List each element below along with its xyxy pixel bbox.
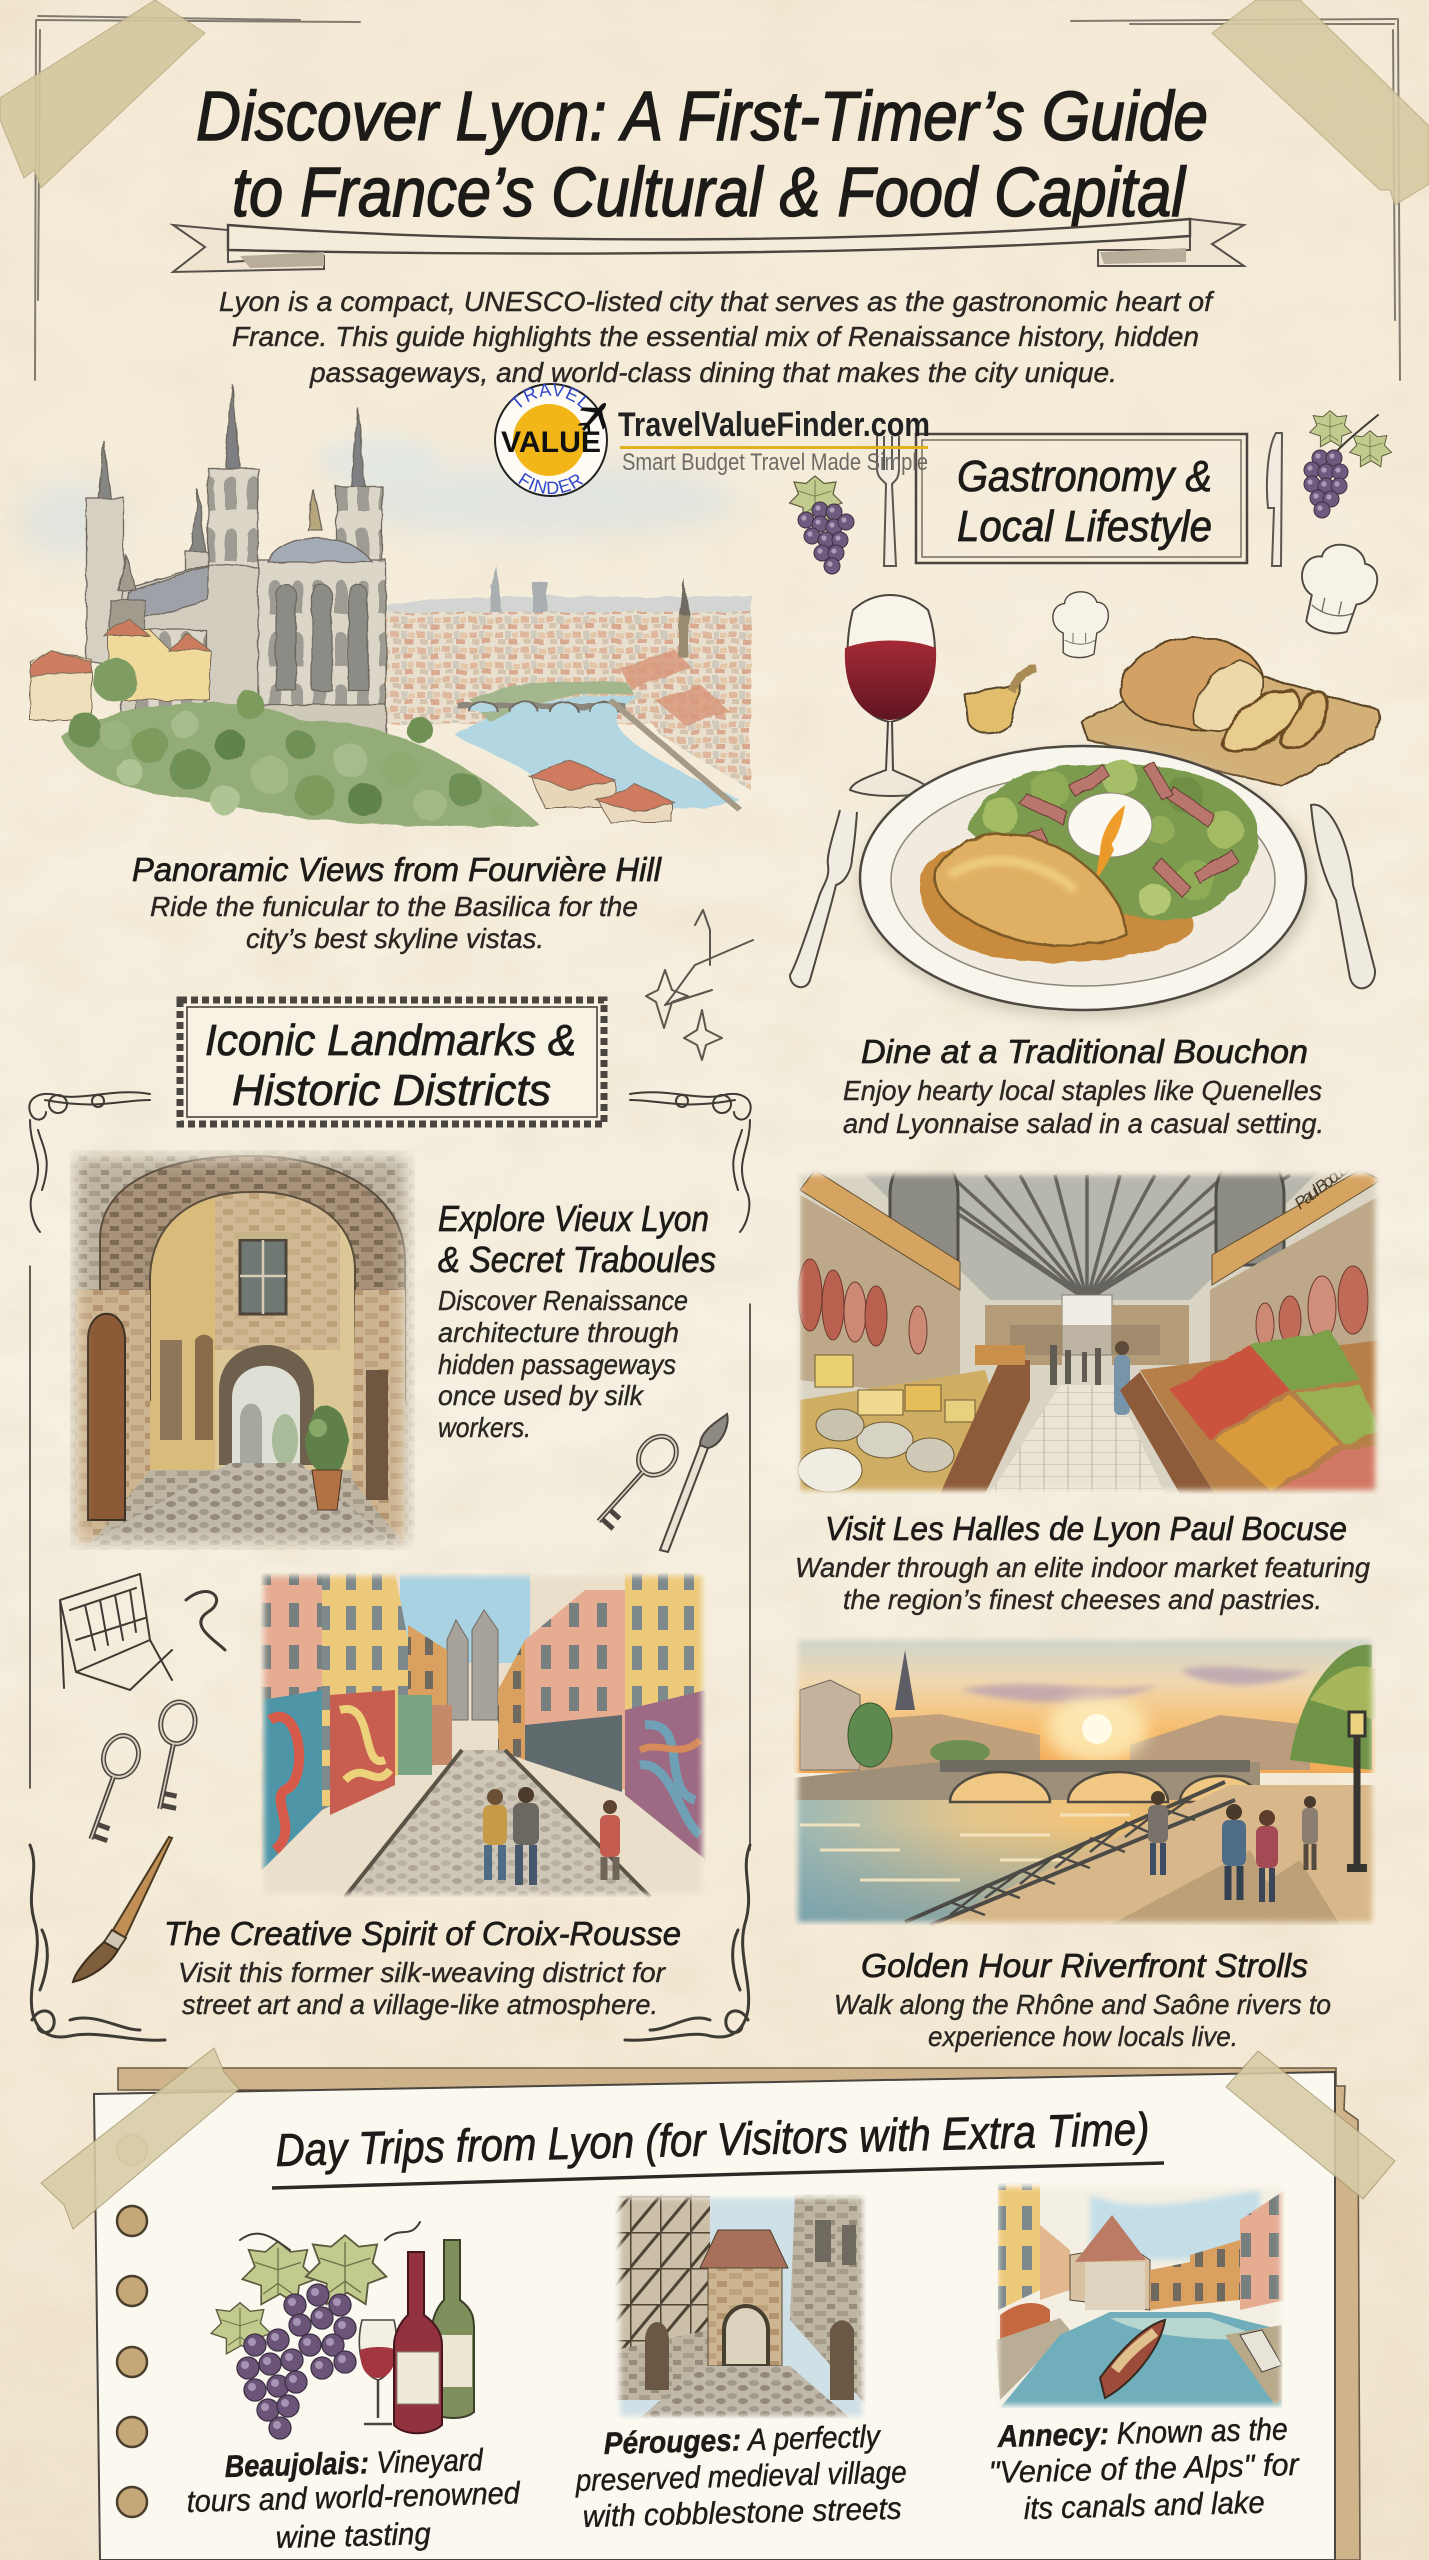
- caption: Golden Hour: Golden Hour Riverfront Strolls: [861, 1947, 1308, 1984]
- red roofs foreground: [528, 760, 674, 822]
- icon: fork beside box: [877, 436, 899, 566]
- cobbled street: [345, 1750, 650, 1897]
- water: [793, 1798, 1293, 1925]
- towers at end of street: [447, 1610, 498, 1720]
- doodle: basilica sketch and sparkles: [646, 910, 753, 1060]
- chef hat small: [1053, 592, 1108, 658]
- poached egg: [1068, 793, 1152, 880]
- right facades: [498, 1640, 525, 1760]
- crowd: [1050, 1345, 1101, 1386]
- intro paragraph: passageways, and world-class dining that makes the city unique.: [309, 357, 1117, 388]
- cutlery knife: [1311, 805, 1375, 988]
- caption: Golden Hour: experience how locals live.: [928, 2021, 1238, 2052]
- bridge: [793, 1762, 1260, 1800]
- section heading: Iconic Landmarks and Historic Districts: Iconic Landmarks &: [205, 1016, 576, 1065]
- section heading: Gastronomy and Local Lifestyle: Local Lifestyle: [957, 502, 1212, 551]
- logo badge: TRAVEL: [510, 383, 586, 408]
- back sheet: [118, 2068, 1360, 2560]
- lamp post: [1354, 1735, 1360, 1868]
- salad: [968, 760, 1258, 920]
- wine glass: [845, 595, 936, 796]
- caption: Golden Hour: Walk along the Rhône and Saône rivers to: [834, 1989, 1331, 2020]
- ornamental frame: landmarks panel: [29, 1092, 751, 2040]
- houses below basilica: [30, 618, 210, 720]
- caption: Dine at a Traditional Bouchon: Dine at a Traditional Bouchon: [861, 1033, 1308, 1070]
- caption: Beaujolais: tours and world-renowned: [186, 2475, 522, 2519]
- tape right: [1226, 2051, 1395, 2199]
- grapes top right: [1304, 411, 1392, 518]
- illustration: golden hour riverfront: [793, 1633, 1376, 1925]
- doodle: large paintbrush: [73, 1837, 172, 1982]
- title: [196, 77, 1208, 231]
- people walking: [483, 1787, 620, 1885]
- railing: [905, 1782, 1235, 1925]
- illustration: Annecy canal: [994, 2183, 1285, 2408]
- intro paragraph: France. This guide highlights the essential mix of Renaissance history, hidden: [232, 321, 1199, 352]
- promenade: [930, 1785, 1376, 1925]
- caption: Annecy: [988, 2411, 1301, 2526]
- left stall: [800, 1195, 960, 1400]
- caption: Croix-Rousse: [164, 1915, 681, 2020]
- text: Explore Vieux Lyon and Secret Traboules: hidden passageways: [438, 1349, 676, 1380]
- bread on wooden board: [1082, 637, 1380, 786]
- produce stalls: [1140, 1340, 1381, 1494]
- left facades: [260, 1573, 322, 1870]
- wine glass: [359, 2320, 396, 2380]
- intro paragraph: Lyon is a compact, UNESCO-listed city that serves as the gastronomic heart of: [219, 286, 1215, 317]
- caption: Les Halles: Wander through an elite indoor market featuring: [795, 1552, 1370, 1583]
- intro paragraph: [219, 286, 1215, 388]
- logo wordmark: TravelValueFinder.com: [618, 406, 930, 444]
- logo: Travel Value Finder: [494, 383, 930, 497]
- cutlery fork: [790, 810, 857, 987]
- logo badge: FINDER: [518, 472, 584, 494]
- caption: Beaujolais: [186, 2442, 522, 2555]
- day trips heading: Day Trips from Lyon (for Visitors with Extra Time): [275, 2103, 1150, 2176]
- section heading: Gastronomy and Local Lifestyle: [916, 434, 1247, 563]
- shopper: [1114, 1355, 1130, 1415]
- logo badge: [494, 383, 608, 497]
- hand drawn page frame: [35, 16, 1400, 380]
- distant skyline and city: [380, 565, 752, 810]
- panel: day trips notebook page: [41, 2048, 1395, 2560]
- section heading: Gastronomy and Local Lifestyle: Gastronomy &: [957, 452, 1212, 501]
- section heading: Iconic Landmarks and Historic Districts: Historic Districts: [232, 1066, 551, 1115]
- caption: Les Halles: [795, 1510, 1370, 1615]
- illustration: Beaujolais grapes and wine: [211, 2222, 474, 2439]
- logo wordmark: [618, 406, 930, 476]
- text: Explore Vieux Lyon and Secret Traboules: Explore Vieux Lyon: [438, 1198, 709, 1239]
- caption: Dine at a Traditional Bouchon: and Lyonnaise salad in a casual setting.: [843, 1108, 1324, 1139]
- left murals: [262, 1690, 322, 1870]
- caption: Golden Hour: [834, 1947, 1331, 2052]
- illustration: Les Halles market: Paul Bocuse: [1291, 1155, 1358, 1213]
- caption: Croix-Rousse: Visit this former silk-weaving district for: [178, 1957, 667, 1988]
- doodle: key: [586, 1429, 684, 1533]
- sauce: [920, 846, 1194, 962]
- green bottle: [432, 2240, 474, 2418]
- red bottle: [394, 2252, 442, 2433]
- text: Explore Vieux Lyon and Secret Traboules: once used by silk: [438, 1380, 645, 1411]
- caption: Panoramic Views: [132, 851, 663, 954]
- section heading: Iconic Landmarks and Historic Districts: [180, 1000, 604, 1124]
- title: to France’s Cultural & Food Capital: [232, 153, 1187, 231]
- doodle: two antique keys: [75, 1699, 199, 1845]
- white sheet: [94, 2072, 1335, 2560]
- tape left: [41, 2048, 239, 2229]
- text: Explore Vieux Lyon and Secret Traboules: architecture through: [438, 1317, 679, 1348]
- caption: Les Halles: the region’s finest cheeses and pastries.: [843, 1584, 1322, 1615]
- caption: Dine at a Traditional Bouchon: Enjoy hearty local staples like Quenelles: [843, 1075, 1322, 1106]
- green hillside: [60, 658, 540, 827]
- text: Explore Vieux Lyon and Secret Traboules: Discover Renaissance: [438, 1285, 688, 1316]
- caption: Perouges: with cobblestone streets: [582, 2491, 902, 2534]
- caption: Panoramic Views: city’s best skyline vistas.: [246, 923, 544, 954]
- caption: Beaujolais: Beaujolais: Vineyard: [224, 2442, 485, 2484]
- cheese counter: [800, 1370, 1000, 1494]
- tape: top left: [0, 0, 205, 188]
- caption: Les Halles: Visit Les Halles de Lyon Paul Bocuse: [825, 1510, 1347, 1547]
- caption: Annecy: its canals and lake: [1023, 2485, 1265, 2526]
- glass roof: [860, 1170, 1320, 1300]
- spiral holes: [117, 2135, 147, 2517]
- illustration: Les Halles market: [793, 1151, 1381, 1494]
- caption: Croix-Rousse: street art and a village-like atmosphere.: [182, 1989, 658, 2020]
- basilica: [86, 384, 386, 780]
- plate of quenelle and Lyonnaise salad: [860, 746, 1312, 1017]
- text: Explore Vieux Lyon and Secret Traboules: [438, 1198, 716, 1443]
- caption: Perouges: [574, 2419, 907, 2534]
- text: Explore Vieux Lyon and Secret Traboules: & Secret Traboules: [438, 1239, 716, 1280]
- heading underline: [272, 2163, 1164, 2188]
- illustration: Fourviere basilica and Lyon panorama: [20, 384, 752, 827]
- floor: [990, 1385, 1165, 1494]
- icon: airplane: [572, 394, 617, 440]
- caption: Dine at a Traditional Bouchon: [843, 1033, 1324, 1139]
- text: Explore Vieux Lyon and Secret Traboules: workers.: [438, 1412, 531, 1443]
- sauce boat: [965, 668, 1036, 734]
- caption: Perouges: preserved medieval village: [574, 2454, 907, 2498]
- caption: Croix-Rousse: The Creative Spirit of Croix-Rousse: [164, 1915, 681, 1952]
- quenelle: [935, 834, 1126, 946]
- illustration: Perouges medieval village: [615, 2194, 866, 2419]
- grape clusters: [237, 2284, 356, 2439]
- title ribbon banner: [173, 219, 1244, 272]
- caption: Panoramic Views: Panoramic Views from Fourvière Hill: [132, 851, 663, 888]
- grapes left of gastronomy box: [790, 476, 854, 574]
- caption: Annecy: Annecy: Known as the: [996, 2411, 1288, 2454]
- illustration: Croix-Rousse street: [260, 1573, 706, 1897]
- strollers: [1148, 1791, 1318, 1902]
- right stall: [1210, 1197, 1378, 1362]
- logo badge: VALUE: [501, 426, 601, 459]
- logo wordmark: Smart Budget Travel Made Simple: [622, 449, 928, 476]
- caption: Annecy: "Venice of the Alps" for: [988, 2447, 1301, 2490]
- right murals: [625, 1690, 706, 1860]
- doodle: weaving loom: [60, 1574, 225, 1690]
- chef hat large: [1291, 538, 1383, 640]
- tape: top right: [1212, 0, 1429, 205]
- title: Discover Lyon: A First-Timer’s Guide: [196, 77, 1208, 155]
- caption: Panoramic Views: Ride the funicular to the Basilica for the: [150, 891, 638, 922]
- caption: Perouges: Pérouges: A perfectly: [603, 2419, 882, 2461]
- icon: knife beside box: [1267, 433, 1282, 566]
- caption: Beaujolais: wine tasting: [275, 2516, 431, 2555]
- illustration: Vieux Lyon traboule: [70, 1150, 415, 1550]
- doodle: paintbrush: [660, 1414, 728, 1552]
